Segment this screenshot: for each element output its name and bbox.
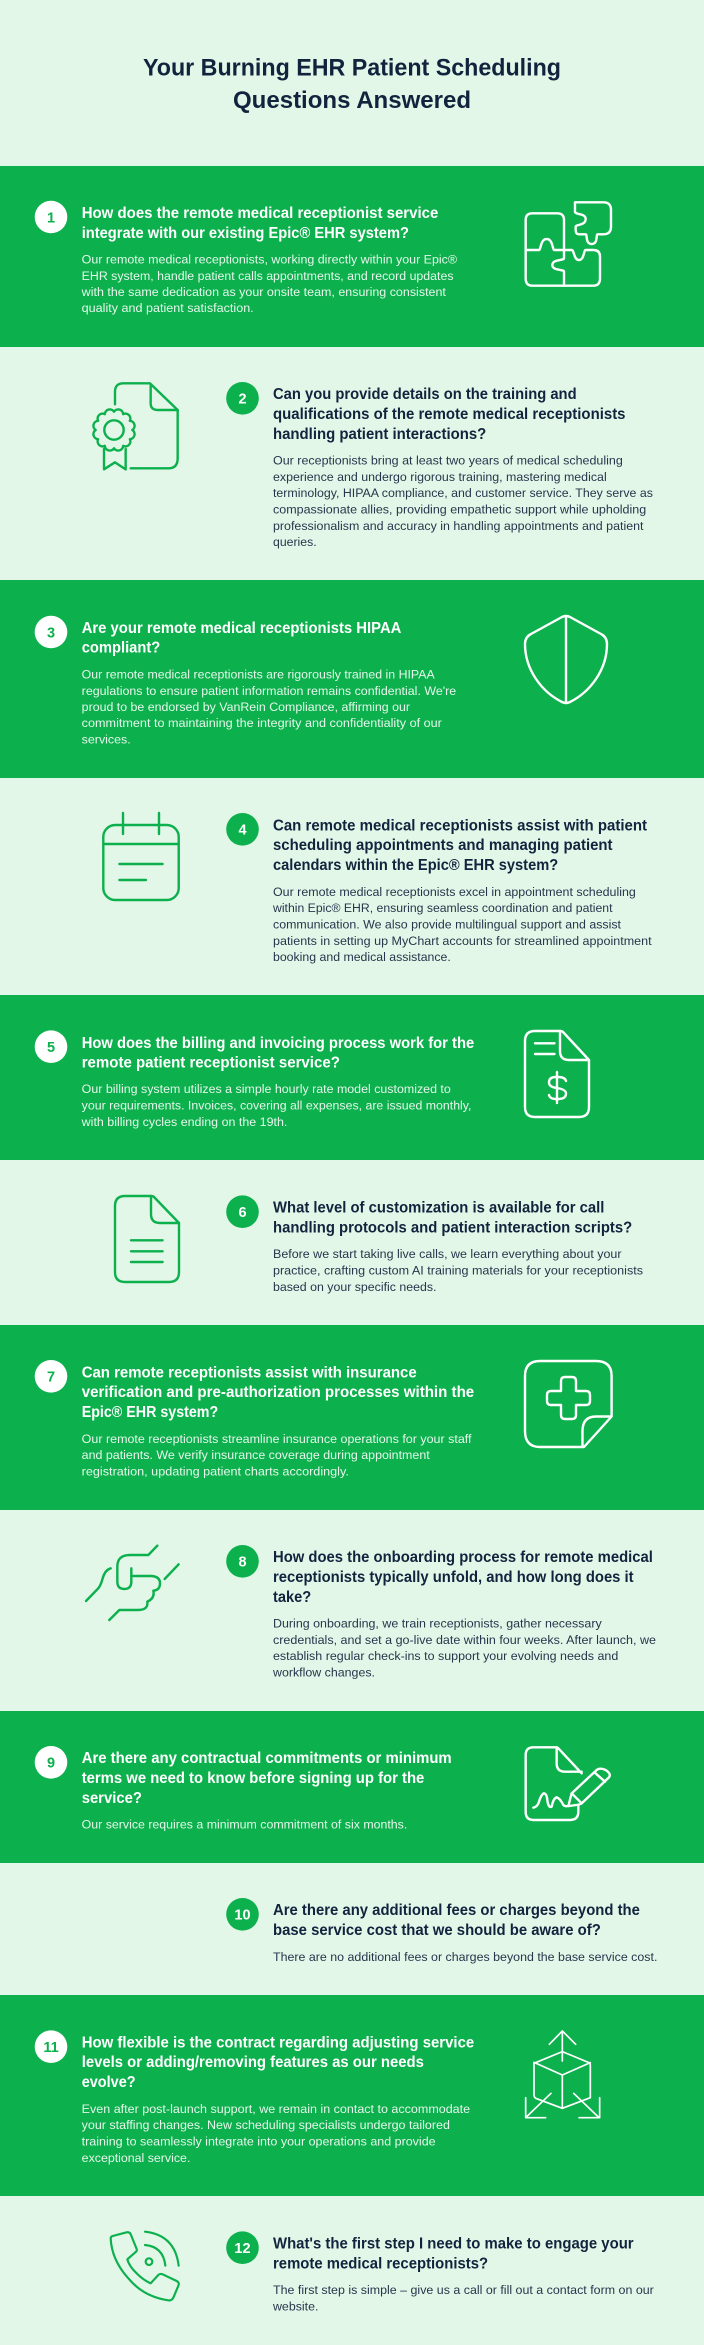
question 7 heading: Epic® EHR system? (82, 1404, 218, 1421)
panel: question 12 (0, 2196, 704, 2345)
question 12 heading: What's the first step I need to make to engage your (273, 2236, 634, 2252)
icon: certificate document (93, 383, 178, 469)
question 6 answer: practice, crafting custom AI training materials for your receptionists (273, 1264, 643, 1278)
number badge 3 (35, 616, 67, 648)
question 4 heading: scheduling appointments and managing patient (273, 837, 613, 854)
panel: question 9 (0, 1711, 704, 1863)
number badge 7 (35, 1360, 67, 1393)
icon: document with lines (115, 1196, 179, 1282)
question 3 answer: commitment to maintaining the integrity and confidentiality of our (82, 716, 442, 730)
question 5 answer (81, 1082, 471, 1129)
question 11 heading: levels or adding/removing features as our needs (82, 2054, 424, 2071)
question 5 heading (82, 1035, 474, 1072)
question 3 answer: Our remote medical receptionists are rigorously trained in HIPAA (82, 668, 435, 682)
question 12 answer: The first step is simple – give us a call or fill out a contact form on our (273, 2283, 654, 2297)
question 5 heading: How does the billing and invoicing process work for the (82, 1035, 474, 1052)
question 2 answer: queries. (273, 535, 317, 549)
panel: question 11 (0, 1995, 704, 2196)
panel: question 7 (0, 1325, 704, 1510)
question 2 heading: qualifications of the remote medical receptionists (273, 406, 626, 423)
question 1 answer (81, 252, 457, 315)
panel: question 6 (0, 1160, 704, 1325)
question 3 heading: Are your remote medical receptionists HIPAA (82, 620, 402, 637)
question 1 heading (82, 205, 438, 242)
question 7 heading (82, 1364, 474, 1421)
question 2 answer: compassionate allies, providing empathetic support while upholding (273, 502, 646, 516)
question 11 heading: evolve? (82, 2074, 136, 2091)
icon: handshake (86, 1546, 179, 1620)
question 6 answer: Before we start taking live calls, we learn everything about your (273, 1247, 622, 1261)
question 2 answer: professionalism and accuracy in handling appointments and patient (273, 519, 644, 533)
question 8 heading: How does the onboarding process for remote medical (273, 1549, 653, 1566)
question 6 heading: handling protocols and patient interaction scripts? (273, 1220, 632, 1236)
number badge 5 (35, 1030, 67, 1063)
number badge 12: 12 (234, 2241, 251, 2257)
question 8 answer: During onboarding, we train receptionists, gather necessary (273, 1616, 603, 1630)
number badge 11 (35, 2030, 67, 2063)
number badge 9 (35, 1746, 67, 1779)
question 3 answer: services. (82, 732, 131, 746)
question 7 answer (82, 1432, 472, 1478)
question 4 heading: Can remote medical receptionists assist with patient (273, 818, 648, 834)
icon: medical cross page (525, 1361, 612, 1447)
icon: puzzle (526, 202, 611, 286)
number badge 8: 8 (238, 1555, 247, 1571)
number badge 1: 1 (47, 210, 55, 226)
panel: question 4 (0, 778, 704, 995)
question 4 answer: patients in setting up MyChart accounts for streamlined appointment (273, 934, 652, 948)
icon: phone with signal (111, 2232, 179, 2300)
question 8 answer: workflow changes. (272, 1666, 375, 1680)
question 11 answer: training to seamlessly integrate into your operations and provide (82, 2134, 436, 2148)
number badge 9: 9 (47, 1756, 55, 1772)
panel: question 1 (0, 166, 704, 347)
number badge 6: 6 (238, 1205, 247, 1221)
question 2 answer: Our receptionists bring at least two years of medical scheduling (273, 454, 623, 468)
question 8 answer: credentials, and set a go-live date within four weeks. After launch, we (273, 1633, 656, 1647)
panel: question 3 (0, 580, 704, 778)
icon: cube with arrows (526, 2031, 600, 2118)
question 11 answer (82, 2102, 470, 2165)
question 1 heading: How does the remote medical receptionist service (82, 205, 438, 222)
question 3 answer (82, 668, 456, 746)
question 3 answer: regulations to ensure patient information remains confidential. We're (82, 684, 456, 698)
question 10 heading (273, 1902, 640, 1939)
question 1 answer: EHR system, handle patient calls appointments, and record updates (82, 269, 453, 283)
question 12 answer (272, 2283, 654, 2314)
question 3 heading (82, 620, 402, 656)
question 1 answer: Our remote medical receptionists, working directly within your Epic® (82, 252, 457, 266)
number badge 7: 7 (47, 1370, 55, 1386)
question 8 heading: receptionists typically unfold, and how long does it (273, 1569, 634, 1586)
question 5 answer: with billing cycles ending on the 19th. (81, 1115, 287, 1129)
question 10 heading: base service cost that we should be aware of? (273, 1922, 601, 1939)
title (143, 54, 561, 114)
question 7 answer: Our remote receptionists streamline insurance operations for your staff (82, 1432, 472, 1446)
icon: signed document with pen (526, 1747, 610, 1820)
question 2 answer (273, 454, 653, 549)
question 7 heading: Can remote receptionists assist with insurance (82, 1364, 417, 1382)
question 12 heading: remote medical receptionists? (273, 2256, 488, 2272)
question 4 heading: calendars within the Epic® EHR system? (273, 857, 558, 874)
number badge 10 (226, 1898, 259, 1931)
question 11 heading (82, 2034, 474, 2091)
question 8 heading (273, 1549, 653, 1606)
number badge 4: 4 (238, 823, 247, 839)
question 7 heading: verification and pre-authorization processes within the (82, 1384, 474, 1401)
title: Questions Answered (233, 87, 471, 114)
question 2 answer: experience and undergo rigorous training, mastering medical (273, 470, 607, 484)
question 2 heading (273, 386, 626, 443)
question 6 answer: based on your specific needs. (273, 1280, 436, 1294)
icon: shield (525, 616, 607, 703)
number badge 12 (226, 2231, 259, 2264)
question 9 heading: terms we need to know before signing up for the (82, 1770, 424, 1787)
panel: question 5 (0, 995, 704, 1160)
question 6 heading: What level of customization is available for call (273, 1200, 604, 1216)
question 5 answer: your requirements. Invoices, covering all expenses, are issued monthly, (82, 1098, 471, 1112)
panel: question 8 (0, 1510, 704, 1711)
question 10 answer: There are no additional fees or charges beyond the base service cost. (273, 1950, 657, 1964)
question 4 answer: Our remote medical receptionists excel in appointment scheduling (273, 885, 636, 899)
number badge 6 (226, 1195, 259, 1228)
question 9 heading: Are there any contractual commitments or minimum (82, 1750, 452, 1767)
title: Your Burning EHR Patient Scheduling (143, 54, 561, 82)
question 9 answer: Our service requires a minimum commitment of six months. (82, 1818, 407, 1832)
question 4 answer: communication. We also provide multilingual support and assist (273, 918, 622, 932)
number badge 10: 10 (234, 1908, 251, 1924)
question 5 heading: remote patient receptionist service? (82, 1054, 340, 1072)
question 7 answer: and patients. We verify insurance coverage during appointment (82, 1448, 430, 1462)
question 4 heading (273, 818, 648, 874)
question 2 heading: Can you provide details on the training and (273, 386, 577, 403)
question 6 heading (273, 1200, 632, 1236)
question 1 answer: quality and patient satisfaction. (82, 301, 254, 315)
question 4 answer: booking and medical assistance. (273, 950, 451, 964)
icon: calendar (103, 813, 179, 900)
number badge 2 (226, 382, 259, 415)
question 8 heading: take? (273, 1589, 311, 1606)
question 11 answer: your staffing changes. New scheduling specialists undergo tailored (82, 2118, 450, 2132)
number badge 3: 3 (47, 625, 55, 641)
number badge 1 (35, 201, 67, 233)
question 7 answer: registration, updating patient charts accordingly. (82, 1464, 349, 1478)
question 12 answer: website. (272, 2300, 318, 2314)
icon: invoice with dollar sign (525, 1031, 589, 1117)
question 1 heading: integrate with our existing Epic® EHR system? (82, 225, 409, 242)
question 4 answer (272, 885, 652, 964)
number badge 8 (226, 1545, 259, 1578)
question 11 answer: exceptional service. (82, 2151, 190, 2165)
question 9 heading (82, 1750, 452, 1807)
question 2 heading: handling patient interactions? (273, 426, 486, 443)
question 9 heading: service? (82, 1790, 142, 1807)
panel: question 2 (0, 347, 704, 580)
number badge 5: 5 (47, 1040, 55, 1056)
question 2 answer: terminology, HIPAA compliance, and customer service. They serve as (273, 486, 653, 500)
question 6 answer (273, 1247, 643, 1294)
panel: question 10 (0, 1863, 704, 1995)
question 11 heading: How flexible is the contract regarding adjusting service (82, 2034, 474, 2052)
question 8 answer: establish regular check-ins to support your evolving needs and (273, 1649, 618, 1663)
question 11 answer: Even after post-launch support, we remain in contact to accommodate (82, 2102, 470, 2116)
question 3 answer: proud to be endorsed by VanRein Compliance, affirming our (82, 700, 410, 714)
question 8 answer (272, 1616, 656, 1680)
number badge 11: 11 (43, 2040, 59, 2056)
question 1 answer: with the same dedication as your onsite team, ensuring consistent (81, 285, 446, 299)
question 12 heading (273, 2236, 634, 2272)
number badge 4 (226, 813, 259, 846)
number badge 2: 2 (238, 392, 247, 408)
question 3 heading: compliant? (82, 640, 160, 656)
question 4 answer: within Epic® EHR, ensuring seamless coordination and patient (272, 901, 613, 915)
question 5 answer: Our billing system utilizes a simple hourly rate model customized to (82, 1082, 451, 1096)
question 10 heading: Are there any additional fees or charges beyond the (273, 1902, 640, 1919)
